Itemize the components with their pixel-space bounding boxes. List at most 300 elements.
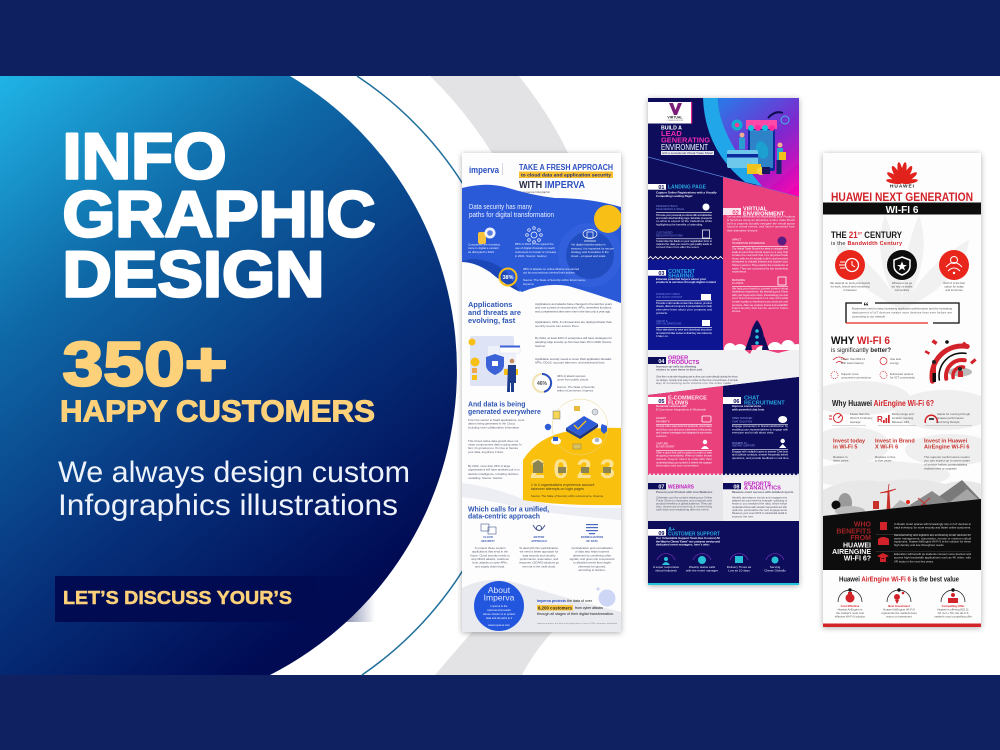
wave column text: more in digital a modern — [468, 246, 499, 250]
call to action button — [55, 576, 375, 622]
wave column text: 85% of 2021 CTOs expect the — [515, 242, 554, 246]
section 04: order products: 04 — [658, 359, 665, 365]
icon: network — [526, 227, 542, 243]
stat: 350+: 350+ — [62, 331, 228, 400]
feature text: concurrent connections — [841, 376, 871, 380]
lower grey clouds — [810, 381, 995, 489]
value text: Huawei is offering 802.11 — [937, 608, 969, 612]
about text: through all stages of their digital transformation. — [537, 612, 614, 616]
section 02: virtual environment: enterprise to virtually interact and explore your — [732, 260, 788, 264]
blue gradient circle panel — [0, 76, 457, 675]
feature text: Enhanced options — [890, 372, 914, 376]
value labels: Cost Effective — [841, 604, 860, 608]
icon: cloud security — [481, 524, 496, 534]
invest text: Replace in five — [875, 455, 896, 459]
heading: why Huawei AirEngine: Why Huawei AirEngine Wi-Fi 6? — [832, 399, 934, 408]
section 01: landing page: Compelling Landing Page! — [656, 194, 692, 198]
value text: the market's most cost — [836, 611, 864, 615]
ring caption: 38% of attacks on online lifetime are carried — [523, 267, 579, 271]
invest text: Replace in — [833, 455, 848, 459]
feature text: with lower latency — [841, 361, 864, 365]
section 08: reports and analytics: improve the rest. — [732, 514, 754, 518]
circle captions: We depend on tools prominently — [830, 281, 871, 285]
features list — [831, 357, 915, 380]
headline: Info Graphic Design: DESIGN — [62, 239, 324, 311]
support icons row — [653, 554, 786, 573]
feature text — [841, 357, 915, 380]
support labels: Low as 10 days — [728, 569, 750, 573]
data body text: mean compromises data is going away. In — [468, 442, 522, 446]
wave column text: customers to remain or increase — [515, 250, 557, 254]
section 05: e-commerce flows: interest, buyers' intent to order with their — [656, 457, 712, 461]
panel: Huawei Wi-Fi 6 infographic — [810, 153, 995, 627]
section 01: landing page: 01 — [658, 185, 664, 191]
support labels: with the event manager — [686, 569, 718, 573]
applications body text: Gartner — [535, 344, 546, 348]
logo box: VIRTUAL — [667, 116, 683, 120]
value labels: Compelling Offer — [942, 604, 965, 608]
who benefits text — [832, 522, 872, 563]
data body text: decision intelligence, including decision — [468, 472, 519, 476]
wave heading — [469, 204, 554, 219]
invest text: in five years — [875, 458, 892, 462]
section 02: virtual environment: We help your brand to convert current virtual — [732, 286, 788, 290]
about text: 6,200 customers — [538, 606, 573, 610]
section 09: customer support: Our Unbeatable Support Team Has Covered All — [656, 536, 720, 540]
wave column text — [468, 242, 614, 258]
value text: AX 4+1 + 5G; the all-in-6 — [938, 611, 969, 615]
section 03: content sharing: attendees learn about your company and — [656, 308, 712, 312]
wave column text: as disrupted in 2021 — [468, 250, 494, 254]
section 03: content sharing: Allow attendees to save and download any piece — [656, 328, 712, 332]
section 02: virtual environment: trade. They are consumed by the tradeshow — [732, 266, 789, 270]
illustration: phone storefront — [727, 112, 789, 175]
section 05: e-commerce flows: CAPTURE — [656, 442, 668, 445]
section 03: content sharing: products & services through digital content — [656, 280, 716, 284]
about Imperva circle: data and all paths to it — [486, 616, 512, 620]
section 05: e-commerce flows: shopping immediately. When a visitor shows — [656, 454, 713, 458]
ring caption: Imperva — [523, 282, 534, 286]
three column labels: BETTER — [534, 535, 544, 539]
heading: 21st century: ST — [858, 230, 863, 236]
three column labels: NORMALIZATION — [581, 535, 603, 539]
black bar with Wi-Fi 6 — [823, 202, 981, 216]
icon: normalization lines — [586, 524, 598, 534]
black panel — [823, 499, 981, 570]
benefit text: VR study in the next few years. — [894, 559, 934, 563]
invest headings: in Wi-Fi 5 — [833, 445, 857, 451]
section 05: e-commerce flows: information and your conversions. — [656, 464, 700, 468]
heading: and data is being generated: And data is being — [468, 402, 525, 409]
section 02: virtual environment: services. Also we explore brand and establish — [732, 303, 788, 307]
card contents: An Imperva Infographic — [519, 190, 551, 194]
value text: represents the market's best — [881, 611, 917, 615]
heading: applications and threats: and threats are — [468, 308, 521, 317]
value text: market's most compelling offer — [934, 614, 972, 618]
Imperva title: WITH IMPERVA — [519, 180, 585, 191]
wave column text: strategy and innovation in the — [571, 250, 609, 254]
illustration: mountains and windmills — [832, 480, 981, 516]
data body text: organizations will have analysts put it on — [468, 468, 520, 472]
benefit text: Manufacturing and logistics are embracing smart devices for — [894, 533, 971, 537]
AirEngine feature text: location roaming — [892, 416, 914, 420]
section 08: reports and analytics: optimize, personalize the next engagements — [732, 508, 788, 512]
three column body text: of data also helps Imperva — [575, 550, 609, 554]
section 07: webinars: WEBINARS — [668, 484, 694, 490]
section 01: landing page: RESEARCH-BACK — [656, 205, 678, 208]
ring chart 46%: 46% — [537, 381, 548, 387]
feature icon 2 — [880, 358, 887, 364]
rocket base fragments — [745, 350, 790, 354]
icon: person with screen — [478, 228, 496, 244]
section 02: virtual environment: show, with an all virtually built-in and branded — [732, 256, 788, 260]
three column body text: To protect these modern — [474, 546, 506, 550]
three column body text — [470, 546, 615, 572]
section 01: landing page: Customize the fields on your registration form to — [656, 239, 712, 243]
section 01: landing page: Capture Online Registrations with a Visually — [656, 190, 717, 194]
section 01: landing page: REGISTRATION FORM — [656, 234, 683, 238]
three column labels: OF DATA — [586, 539, 598, 543]
section 05: e-commerce flows: Offer a quick link call for action to order or start — [656, 450, 712, 454]
panel: Virtual trade show infographic — [648, 98, 808, 585]
section 09: customer support: A+ — [668, 527, 676, 533]
section 04: order products: Increase up-sells by allowing — [656, 364, 696, 368]
data body text: From the sensor to SaaS applications, more — [468, 418, 525, 422]
section 02: virtual environment: your brand and people in a way that adds — [732, 296, 789, 300]
circle captions: we rely on stable — [892, 284, 913, 288]
section 08: reports and analytics: leads to you analysed the data, which helps — [732, 502, 788, 506]
section 02: virtual environment: & LOGOS — [732, 282, 744, 285]
section 02: virtual environment: BRANDING — [732, 279, 745, 282]
invest headings: Invest in Brand — [875, 439, 915, 445]
AirEngine feature text: Between APs — [892, 420, 910, 424]
icon: wifi six circle — [939, 250, 969, 280]
grey footer wave — [462, 580, 621, 632]
logo box — [648, 102, 692, 124]
section 03: content sharing: Provide multi-media content like videos, product — [656, 301, 712, 305]
three column body text: Centralization and normalization — [571, 546, 613, 550]
section 03: content sharing: GROUP & — [656, 320, 668, 323]
icon: stopwatch circle — [835, 250, 865, 280]
about Imperva circle — [474, 581, 524, 631]
heading: 21st century: THE 21 — [831, 230, 859, 240]
support labels: Weekly status calls — [689, 565, 716, 569]
heading: why Wi-Fi 6: WHY WI-FI 6 — [831, 335, 890, 347]
heading: 21st century — [831, 230, 903, 247]
section 07: webinars: Celebrate your live content sharing your Online — [656, 495, 712, 499]
Imperva title: TAKE A FRESH APPROACH — [519, 163, 613, 172]
support item 3 — [730, 554, 748, 563]
card contents — [462, 163, 622, 632]
section 02: virtual environment: TRADESHOW EXPERIENCE — [732, 242, 765, 245]
value labels — [841, 604, 965, 608]
heading: 21st century: is the Bandwidth Century — [831, 241, 903, 247]
data body text: fact, it's growing too. It's time to Secure — [468, 446, 518, 450]
about text: Imperva protects the data and applications of over 6,200 customers worldwide — [537, 622, 618, 625]
tagline text: Infographics illustrations — [58, 489, 398, 522]
value item: cost effective — [838, 588, 862, 602]
benefit text: equipment. Huawei AirEngine Wi-Fi 6 is the solution for these — [894, 540, 971, 544]
heading: 21st century: CENTURY — [862, 230, 902, 240]
sawtooth divider — [648, 473, 808, 477]
card contents — [810, 162, 995, 627]
benefit text — [894, 522, 971, 563]
wave heading: Data security has many — [469, 204, 532, 211]
section 08: reports and analytics: REPORTS — [744, 481, 771, 487]
section 06: chat recruitment: everyone and to talk about visits. — [732, 431, 774, 435]
about Imperva circle: www.imperva.com — [488, 623, 511, 627]
section 07: webinars: Present your Product with Live Webinars — [656, 490, 713, 494]
section 06: chat recruitment: questions, and provide feedback in real time. — [732, 456, 790, 460]
heading: which calls for: data-centric approach — [468, 514, 540, 521]
ring caption 46%: Source: The State of Security — [557, 385, 595, 389]
section 02: virtual environment: experience. — [732, 270, 747, 274]
about text: Imperva protects the data of over — [537, 599, 593, 603]
section 02: virtual environment: VIRTUAL — [743, 207, 768, 213]
who benefits text: HUAWEI — [843, 542, 871, 549]
illustration: clouds — [724, 340, 803, 360]
section 06: chat recruitment: and collects contacts, answer frequently asked — [732, 453, 788, 457]
card contents — [648, 98, 808, 585]
subheading: happy customers: HAPPY CUSTOMERS — [60, 394, 375, 428]
three column body text: according to Gartner. — [578, 568, 606, 572]
feature text: for IOT connectivity — [890, 376, 915, 380]
about Imperva circle: Imperva — [484, 592, 515, 602]
heading: and data is being generated: generated everywhere — [468, 409, 541, 416]
invest headings — [833, 439, 969, 451]
section 06: chat recruitment: OPEN SOURCED — [732, 417, 752, 420]
section 07: webinars: also download presenting & networking — [656, 504, 712, 508]
top navy band — [0, 0, 1000, 76]
illustration: rocket — [745, 320, 769, 350]
section 07: webinars: calls back and rewatching after the event. — [656, 508, 709, 512]
heading: and data is being generated — [468, 402, 541, 416]
section 04: order products: no delays, simple and easy to order at the time of purchase. A simple — [656, 378, 738, 382]
section 08: reports and analytics: patterns for your event for example: collecting of — [732, 498, 787, 502]
circle captions: option for today — [944, 284, 964, 288]
circle captions: and tomorrow — [945, 288, 964, 292]
section 03: content sharing: VIRTUAL BRIEFCASE — [656, 323, 682, 326]
feature text: Use less — [890, 357, 902, 361]
invest text: you can expect up to seven years — [924, 458, 971, 462]
feature text: energy — [890, 361, 899, 365]
three column labels: SECURITY — [481, 539, 495, 543]
section 03: content sharing: products. — [656, 311, 668, 315]
three column body text: future, Cloud security needs to — [470, 553, 510, 557]
card background — [823, 153, 981, 627]
three column body text: data security and security — [523, 553, 556, 557]
about Imperva circle: About — [488, 585, 511, 595]
ring chart 38%: 38% — [502, 275, 514, 281]
section 05: e-commerce flows: and custom messages into integrated e-commerce — [656, 431, 712, 435]
logo box: COMMUNICATIONS — [667, 119, 684, 122]
section 03: content sharing: Educate potential buyers about your — [656, 277, 707, 281]
about Imperva circle: Imperva is the — [491, 604, 508, 608]
feature text: Support more — [841, 372, 859, 376]
AirEngine feature text: average — [850, 420, 861, 424]
section 01: landing page: and customized landing page. Educate prospects — [656, 216, 713, 220]
bottom navy band — [0, 675, 1000, 750]
section 01: landing page: highlighting the benefits of attending. — [656, 222, 703, 226]
three column body text: to allowlist events that insight — [573, 561, 611, 565]
three column labels — [481, 536, 603, 542]
wave column text: Companies are investing — [468, 242, 500, 246]
section 05: e-commerce flows: PAYMENTS — [656, 420, 670, 423]
three column body text: performance, automation, and — [520, 557, 559, 561]
section 03: content sharing: AND AUDIO CONTENT — [656, 296, 683, 299]
section 02: virtual environment: tradeshow experience. By branding your Show — [732, 290, 789, 294]
watermark grey petals — [835, 215, 969, 310]
benefit icons — [877, 522, 889, 562]
icon: better approach — [533, 525, 545, 530]
who benefits text: AIRENGINE — [832, 549, 871, 556]
data body text — [468, 418, 525, 480]
three column body text: even as in the multi-cloud. — [522, 564, 556, 568]
applications body text — [535, 302, 612, 364]
section 09: customer support: dedicated event managers, here's why: — [656, 543, 710, 547]
section 02: virtual environment: Show in person. They explore the experience of — [732, 263, 788, 267]
section 02: virtual environment: create loyalty to represent your products and — [732, 300, 788, 304]
section 05: e-commerce flows: ACCEPT — [656, 417, 667, 420]
section 01: landing page: Promote your personal you show with and attractive — [656, 213, 712, 217]
icon: signal bars — [877, 415, 890, 424]
AirEngine feature text: Faster than the — [850, 412, 870, 416]
section 03: content sharing: sheets, discount coupons & presentations to help — [656, 304, 712, 308]
section 05: e-commerce flows: BUYER INTENT — [656, 446, 675, 449]
circle captions: in between — [843, 288, 857, 292]
Imperva title — [519, 164, 613, 188]
section 01: landing page: convert them from after the event. — [656, 245, 700, 249]
wave column text: in 2021. Source: Gartner — [515, 254, 547, 258]
ring caption 46% — [557, 374, 595, 392]
three column body text: applications that send in the — [472, 550, 508, 554]
grey ground clouds — [823, 479, 981, 520]
applications body text: Applications, APIs, & microservices are deployed faster than — [535, 320, 612, 324]
three column body text: bots, attacks on open APIs, — [472, 561, 508, 565]
section 01: landing page — [648, 184, 717, 249]
call to action button: LET’S DISCUSS YOUR’S — [63, 587, 292, 608]
three column labels: CLOUD — [483, 535, 493, 539]
support labels: Delivery Times as — [727, 565, 752, 569]
three column labels: APPROACH — [531, 539, 547, 543]
section 08: reports and analytics: 08 — [733, 485, 740, 491]
quote box: deployment of IoT devices means more devices than ever before are — [852, 310, 952, 314]
section 02: virtual environment: found in virtual events, and have it accessed from — [727, 225, 796, 229]
heading: why Wi-Fi 6: is significantly better? — [831, 348, 891, 354]
red bottom strip — [823, 624, 981, 627]
section 06: chat recruitment — [723, 396, 790, 460]
ring caption: out by unconscious criminal bots actions. — [523, 270, 576, 274]
section 05: e-commerce flows: E-COMMERCE — [668, 396, 707, 402]
benefit text: In Retail, smart spaces will increasingly rely on IoT devices to — [894, 522, 971, 526]
feature icon 1 — [833, 357, 846, 363]
section 02: virtual environment: Our Virtual Trade Show's live area to navigate and — [732, 246, 788, 250]
three column body text: and supply chain fraud. — [475, 564, 505, 568]
section 09: customer support: 09 — [658, 531, 664, 537]
invest headings: Invest in Huawei — [924, 439, 968, 445]
heading: which calls for — [468, 507, 549, 521]
section 06: chat recruitment: enabling your representatives to engage with — [732, 427, 788, 431]
section 04: order products — [648, 356, 738, 385]
support labels: Clients Globally — [764, 569, 786, 573]
feature text: Faster than 802.11 — [841, 357, 865, 361]
pink section left — [648, 386, 723, 475]
section 05: e-commerce flows: and inform you and your customers of discounts, — [656, 427, 712, 431]
section 04: order products: way of converting more visitors into the order made. — [656, 381, 732, 385]
heading: applications and threats — [468, 300, 521, 325]
grey curved band bottom — [435, 632, 552, 675]
benefit text: access high bandwidth applications such as 4K video, with — [894, 555, 971, 559]
section 01: landing page: CUSTOMIZED — [656, 232, 673, 234]
section 06: chat recruitment: CHAT — [744, 396, 760, 402]
section 06: chat recruitment: 06 — [733, 399, 740, 405]
zigzag divider left — [648, 256, 723, 259]
hero tagline: with a sensational Virtual Trade Show! — [662, 151, 713, 155]
section 02: virtual environment: built to properly actually navigate the virtual space — [727, 221, 795, 225]
who benefits text: WI-FI 6? — [844, 556, 871, 563]
section 06: chat recruitment: MODERN 1X — [732, 442, 747, 445]
pink section background — [723, 177, 799, 350]
circle captions: connectivity — [895, 288, 910, 292]
heading: applications and threats: Applications — [468, 300, 512, 309]
section 08: reports and analytics — [723, 481, 794, 518]
applications body text: adopting edge security up from less than 1% in 2018. Source: — [535, 340, 612, 344]
red title: HUAWEI NEXT GENERATION — [831, 192, 973, 204]
section 02: virtual environment: & Services using an attractive online trade Booth — [727, 218, 795, 222]
heading: why Wi-Fi 6 — [831, 335, 891, 354]
circle captions — [830, 281, 965, 292]
navy customer support background — [648, 521, 799, 583]
benefit dividers — [876, 534, 971, 552]
feature icon 3 — [831, 372, 838, 378]
wave heading: paths for digital transformation — [469, 212, 554, 219]
three column body text: response. (SOAR) solutions go — [519, 561, 559, 565]
data body text: This Cloud-native data growth does not — [468, 439, 518, 443]
yellow panel text: 1 in 4 organisations experience account — [531, 483, 594, 487]
panel: Imperva infographic — [462, 153, 622, 632]
section 08: reports and analytics: Identify attendance trends and engagement — [732, 495, 787, 499]
section 04: order products background — [648, 350, 799, 395]
black bar with Wi-Fi 6: WI-FI 6 — [886, 205, 919, 216]
three column body text: we need a better approach for — [520, 550, 558, 554]
invest headings: Invest today — [833, 439, 866, 445]
grey wave — [462, 483, 621, 520]
feature icon 4 — [880, 372, 887, 378]
value text: return on investment — [886, 614, 912, 618]
section 04: order products: ORDER — [668, 356, 688, 362]
section 03: content sharing: SHARE RICH VIDEO — [656, 293, 680, 296]
icon: gauge timer — [829, 414, 842, 422]
section 01: landing page: capture the data you need to get quality leads to — [656, 242, 712, 246]
thin teal arc — [357, 76, 519, 675]
section 05: e-commerce flows: FLOWS — [668, 400, 688, 406]
benefit text: track inventory, for more security and faster online customers. — [894, 525, 971, 529]
hero title — [661, 125, 710, 152]
yellow circle — [594, 205, 622, 233]
illustration: app security — [468, 336, 520, 392]
icon: signal bars: R — [877, 415, 883, 424]
about Imperva circle: cybersecurity leader — [487, 608, 511, 612]
AirEngine feature text: Better range and — [892, 412, 914, 416]
icon: shield star circle — [887, 250, 917, 280]
value text: Huawei AirEngine Wi-Fi 6 — [883, 608, 915, 612]
Huawei logo: HUAWEI — [890, 184, 915, 190]
section 02: virtual environment: shows. — [732, 309, 741, 313]
navy section right — [723, 377, 799, 475]
ring chart 46% — [533, 374, 551, 392]
applications body text: By 2024, at least 40% of enterprises will have strategies for — [535, 336, 612, 340]
three column body text: otherwise be ignored, — [578, 564, 606, 568]
